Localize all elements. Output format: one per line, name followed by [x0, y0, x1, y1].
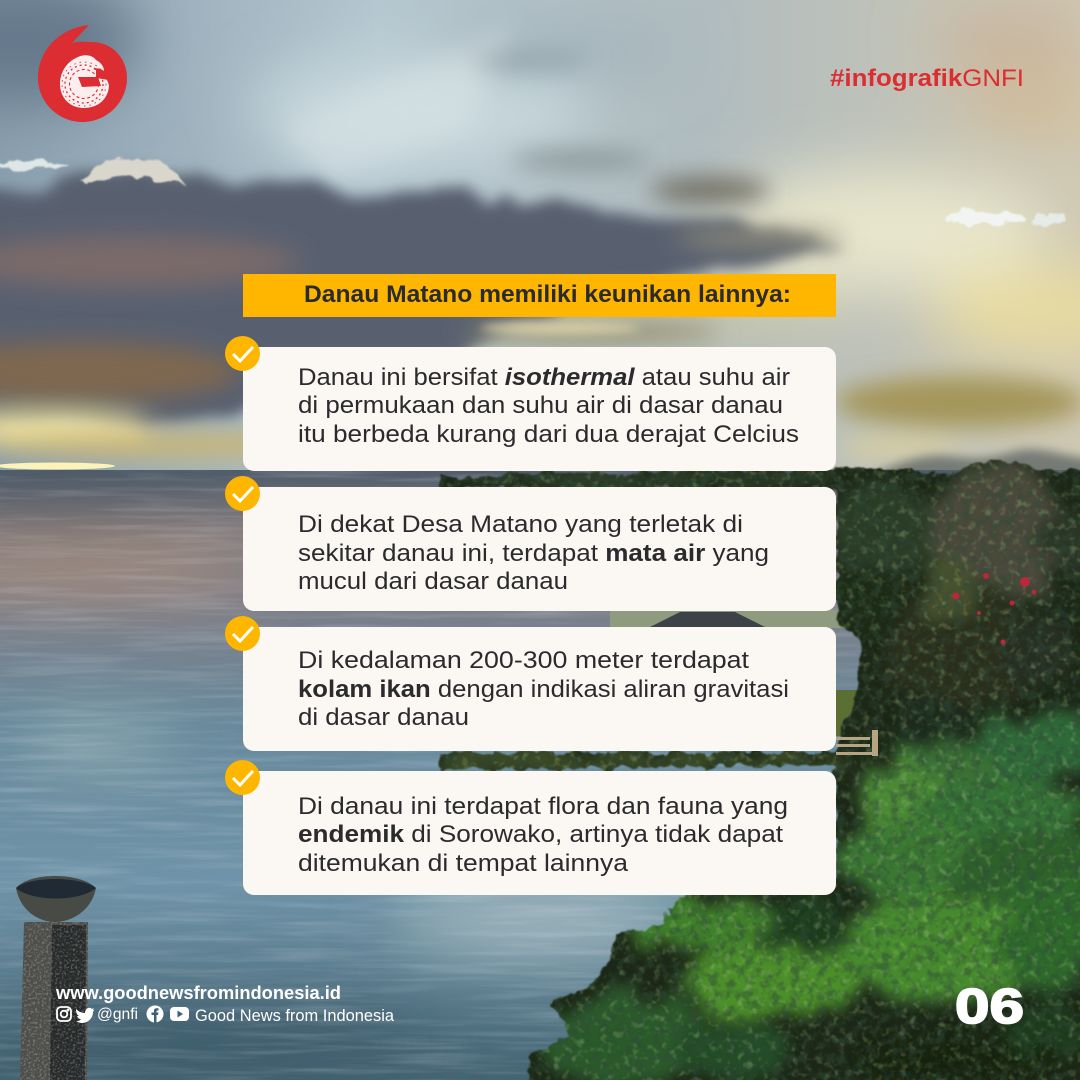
red flowers [952, 573, 1036, 644]
lake water [0, 470, 1080, 1080]
card 1 text [298, 364, 799, 448]
card 3 text [298, 647, 789, 731]
hashtag: #infografik GNFI [830, 65, 1024, 92]
jetty [836, 730, 878, 756]
light cloud fringe behind heading [480, 322, 640, 334]
stone pillar with bowl [16, 876, 96, 1080]
page name: Good News from Indonesia [195, 1006, 395, 1025]
card 4 text [298, 793, 788, 877]
card 2 text: Di dekat Desa Matano yang terletak di [298, 511, 743, 538]
card 1 text: itu berbeda kurang dari dua derajat Celcius [298, 421, 799, 448]
sun glint on horizon [0, 462, 115, 470]
sky [0, 0, 1080, 475]
heading bar [243, 274, 836, 317]
card 2 text [298, 511, 769, 595]
page number: 06 [955, 980, 1024, 1034]
lawn patch [836, 690, 858, 736]
card 2 text: mucul dari dasar danau [298, 568, 568, 595]
icon: check 3 [225, 616, 260, 651]
card 1 text: Danau ini bersifat isothermal atau suhu air [298, 364, 790, 391]
land and trees [430, 440, 1080, 1080]
icon: check 4 [225, 760, 260, 795]
icon: instagram [57, 1007, 71, 1021]
card 3 text: Di kedalaman 200-300 meter terdapat [298, 647, 749, 674]
icon: youtube [170, 1007, 189, 1021]
logo: red swoosh circle [38, 25, 127, 122]
light strip between shore and trees [610, 610, 850, 628]
heading text: Danau Matano memiliki keunikan lainnya: [304, 281, 791, 308]
card 3 text: kolam ikan dengan indikasi aliran gravitasi [298, 676, 789, 703]
icon: check 1 [225, 336, 260, 371]
social handle: @gnfi [97, 1006, 138, 1023]
panel: card 4 endemik [225, 760, 836, 895]
website url: www.goodnewsfromindonesia.id [55, 983, 341, 1003]
house roof [650, 612, 765, 627]
card 4 text: ditemukan di tempat lainnya [298, 850, 628, 877]
icon: check 2 [225, 476, 260, 511]
footer [55, 983, 395, 1025]
card 3 text: di dasar danau [298, 704, 469, 731]
icon: twitter [76, 1008, 94, 1023]
icon: facebook [146, 1006, 164, 1023]
logo: eagle emblem [60, 55, 109, 108]
clouds [0, 156, 1080, 470]
logo [38, 25, 127, 122]
panel: card 1 isothermal [225, 336, 836, 471]
panel: card 3 kolam ikan [225, 616, 836, 751]
card 1 text: di permukaan dan suhu air di dasar danau [298, 392, 783, 419]
distant hills [875, 449, 1080, 495]
card 4 text: Di danau ini terdapat flora dan fauna yang [298, 793, 788, 820]
card 2 text: sekitar danau ini, terdapat mata air yang [298, 540, 769, 567]
panel: card 2 mata air [225, 476, 836, 611]
card 4 text: endemik di Sorowako, artinya tidak dapat [298, 821, 783, 848]
